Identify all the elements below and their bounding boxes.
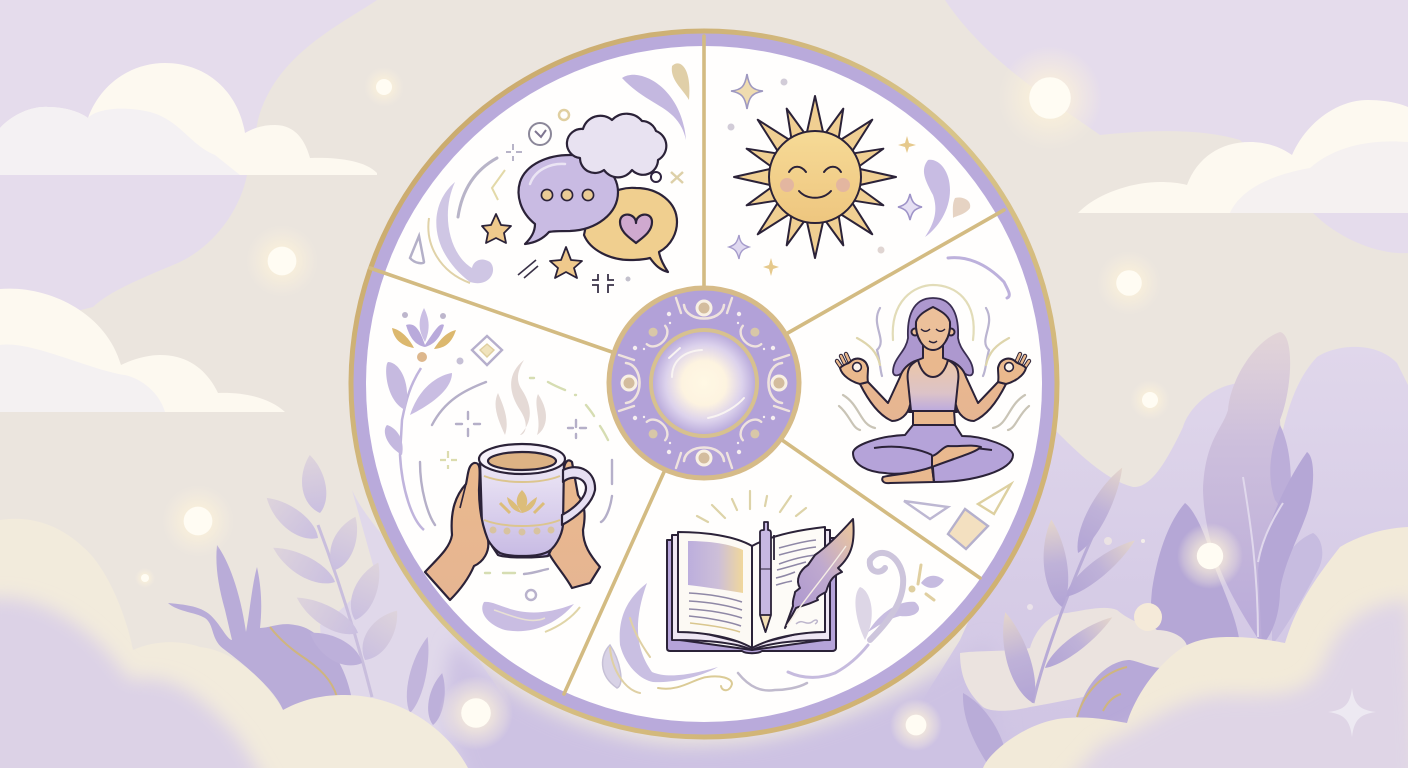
cup pattern bbox=[484, 476, 560, 536]
background plants left bbox=[168, 453, 449, 726]
face bbox=[921, 329, 945, 342]
hands bbox=[837, 354, 868, 384]
big back leaf bbox=[1203, 332, 1290, 645]
gold speech bubble bbox=[584, 188, 677, 272]
sparkle bbox=[1328, 688, 1376, 737]
swirl decoration bbox=[410, 63, 689, 293]
cloud: middle left bbox=[0, 289, 285, 412]
body bbox=[860, 307, 1006, 425]
lilac sky left bbox=[0, 0, 377, 330]
bottom clouds bbox=[0, 519, 1408, 768]
feather bbox=[785, 519, 854, 628]
segment dividers bbox=[370, 36, 1004, 694]
segment: conversation bbox=[410, 63, 689, 293]
hair bbox=[893, 298, 973, 375]
stars bbox=[482, 214, 582, 278]
rays above book bbox=[697, 491, 806, 522]
floral decoration bbox=[385, 308, 502, 530]
lilac speech bubble bbox=[519, 155, 618, 244]
segment: meditation bbox=[837, 258, 1029, 549]
segment: warm drink bbox=[385, 308, 612, 632]
segment: sun bbox=[728, 74, 970, 276]
lilac band under wheel bbox=[445, 640, 1010, 768]
lilac patch left bbox=[320, 490, 620, 768]
glowing orb bbox=[651, 330, 757, 436]
center medallion bbox=[609, 288, 799, 478]
book bbox=[667, 527, 836, 653]
background plants right bbox=[960, 332, 1322, 768]
page lines bbox=[689, 540, 816, 626]
cardinal ornaments bbox=[619, 298, 789, 468]
dotted ring bbox=[420, 378, 612, 574]
wheel bbox=[351, 31, 1057, 737]
orb highlights bbox=[669, 348, 744, 418]
flourishes bbox=[603, 553, 944, 693]
cloud: top left bbox=[0, 63, 377, 175]
clouds top bbox=[0, 63, 1408, 412]
right hand bbox=[548, 460, 600, 588]
aura lines bbox=[839, 258, 1029, 430]
legs bbox=[853, 425, 1013, 483]
cloud: top right bbox=[1078, 100, 1408, 213]
left hand bbox=[425, 463, 488, 600]
sun bbox=[734, 96, 896, 258]
cloud: bottom left bbox=[0, 519, 468, 768]
segment: journaling bbox=[603, 491, 944, 693]
stem leaves bbox=[259, 453, 406, 666]
steam bbox=[496, 360, 546, 435]
glowing orbs bbox=[135, 46, 1243, 751]
pen bbox=[760, 522, 774, 632]
sparkles bbox=[728, 74, 970, 276]
cup bbox=[479, 444, 595, 557]
outer gold rim bbox=[351, 31, 1057, 737]
white dial bbox=[366, 46, 1042, 722]
dark left leaf bbox=[1150, 503, 1240, 650]
dark leaf blobs bbox=[1077, 660, 1160, 725]
bottom swirl bbox=[482, 590, 580, 632]
cream cloud behind branch bbox=[960, 608, 1187, 711]
blue right leaf bbox=[1258, 452, 1313, 645]
shapes bbox=[904, 484, 1011, 549]
thought cloud bbox=[567, 114, 666, 177]
book picture bbox=[688, 541, 743, 593]
lilac hills right bbox=[880, 347, 1408, 768]
leafy branch bbox=[1033, 510, 1105, 703]
dark leaf mass bbox=[168, 545, 352, 710]
cloud: bottom right bbox=[983, 527, 1408, 768]
lilac sky right bbox=[945, 0, 1408, 253]
pale right leaf bbox=[1272, 533, 1322, 645]
